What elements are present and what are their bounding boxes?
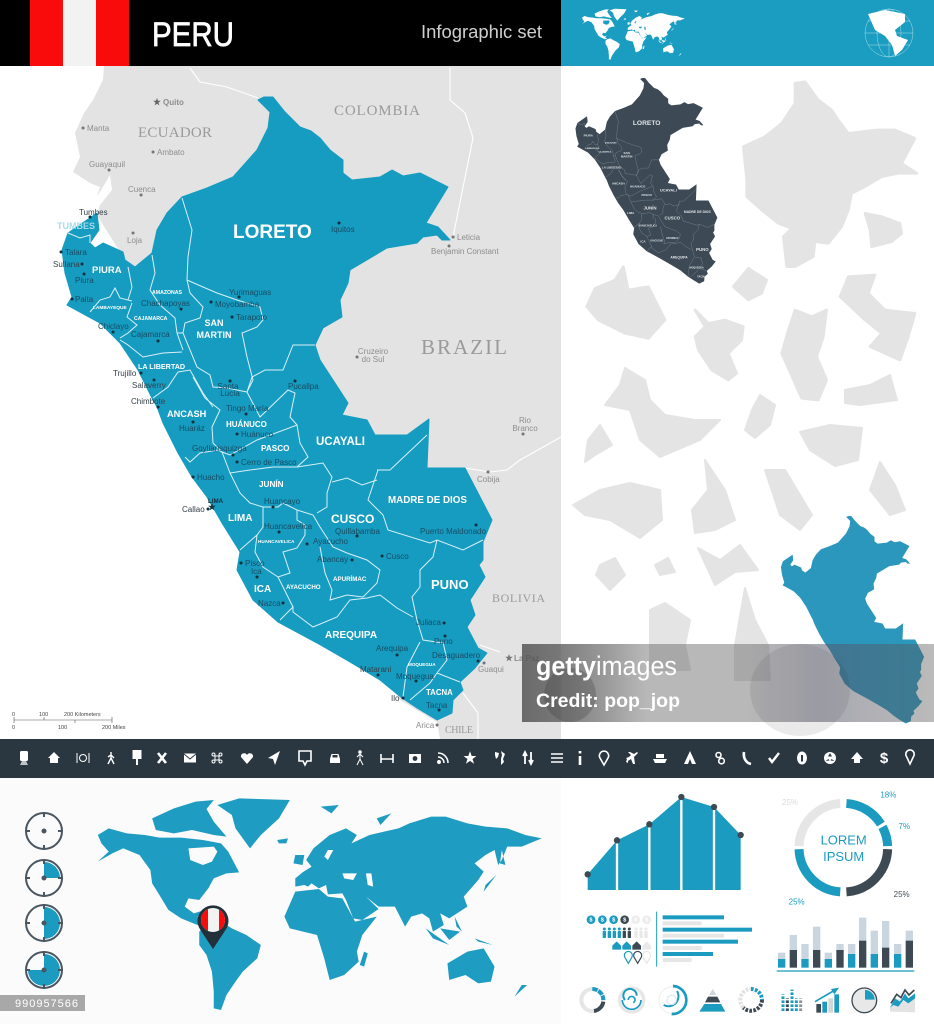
department names: APURÍMAC xyxy=(333,575,367,583)
icon: up-down arrows xyxy=(523,752,533,764)
icon: command xyxy=(212,753,222,763)
clock: half xyxy=(25,904,63,942)
icon: radiation xyxy=(824,752,836,764)
Peru city dots and names: Cerro de Pasco xyxy=(241,458,297,467)
Peru city dots and names: Goyllarisquizga xyxy=(192,444,247,453)
blue Peru silhouette xyxy=(781,516,924,723)
donut chart: IPSUM xyxy=(823,849,864,864)
icon: speech bubble xyxy=(299,751,311,765)
getty logo text: gettyimages xyxy=(536,651,677,681)
Peru city dots and names: Chiclayo xyxy=(98,322,129,331)
neighbouring country names: BRAZIL xyxy=(421,335,507,359)
icon: info letter xyxy=(579,751,581,765)
icon: house xyxy=(48,752,60,763)
Peru city dots and names: Puno xyxy=(434,637,453,646)
icon: info circle xyxy=(797,752,807,764)
icon: gears xyxy=(716,752,724,764)
icon: envelope xyxy=(184,754,196,762)
watermark xyxy=(522,644,934,736)
mini icon: dot matrix bars xyxy=(783,990,801,1011)
icon: ship xyxy=(653,754,667,763)
department names: SAN xyxy=(204,318,224,328)
department names: AMAZONAS xyxy=(152,290,183,296)
icon: bed xyxy=(381,754,393,763)
foreign cities: Quito xyxy=(163,98,184,107)
donut chart xyxy=(782,791,910,906)
pictogram rows: $ xyxy=(612,918,616,924)
department names: LA LIBERTAD xyxy=(138,362,185,371)
Peru city dots and names: Ilo xyxy=(391,694,400,703)
department names: LORETO xyxy=(233,222,312,243)
Peru city dots and names: Tumbes xyxy=(79,208,108,217)
donut chart: 25% xyxy=(894,890,910,899)
scale bar xyxy=(12,712,126,731)
Peru city dots and names: Santa xyxy=(218,382,239,391)
foreign cities: La Paz xyxy=(514,654,539,663)
neighbouring country names: CHILE xyxy=(445,725,473,736)
icon: up arrow xyxy=(851,752,863,763)
world map xyxy=(98,798,542,1010)
neighbouring country borders xyxy=(190,68,561,739)
department names: HUANCAVELICA xyxy=(258,539,295,544)
foreign cities: Rio xyxy=(519,416,532,425)
foreign cities xyxy=(83,98,539,730)
Peru city dots and names xyxy=(53,208,487,710)
department names: ICA xyxy=(254,584,271,595)
icon: earth xyxy=(495,751,505,765)
Peru city dots and names: Tingo María xyxy=(226,404,269,413)
Peru city dots and names: Moquegua xyxy=(396,672,434,681)
dark Peru map: AYACUCHO xyxy=(650,240,663,243)
neighbouring country names: BOLIVIA xyxy=(492,591,545,605)
icon: location pin xyxy=(599,751,609,765)
icon: check mark xyxy=(769,753,779,762)
pictogram rows: $ xyxy=(645,918,649,924)
donut chart: 25% xyxy=(782,798,798,807)
pictogram rows: $ xyxy=(623,918,627,924)
department names: TUMBES xyxy=(57,221,95,231)
department names: CUSCO xyxy=(331,512,374,526)
dark Peru map: UCAYALI xyxy=(660,188,677,193)
clock: three quarters xyxy=(25,951,63,989)
department names: AREQUIPA xyxy=(325,630,377,641)
scale bar: 200 Miles xyxy=(102,725,126,731)
department borders xyxy=(68,198,483,700)
dark Peru map: JUNÍN xyxy=(643,205,656,210)
Peru city dots and names: Callao xyxy=(182,505,205,514)
icon: tent xyxy=(684,751,696,764)
department names: UCAYALI xyxy=(316,436,365,448)
foreign cities: Guaqui xyxy=(478,665,504,674)
icon: star xyxy=(464,751,476,764)
dark Peru map: MADRE DE DIOS xyxy=(684,210,712,214)
Peru city dots and names: Puerto Maldonado xyxy=(420,527,487,536)
icon: airplane xyxy=(626,752,638,764)
pictogram rows: $ xyxy=(601,918,605,924)
pictogram rows: $ xyxy=(589,918,593,924)
Peru map xyxy=(62,97,492,720)
clock: empty xyxy=(25,812,63,850)
foreign cities: Cuenca xyxy=(128,185,156,194)
dark Peru map: PUNO xyxy=(696,247,709,252)
title: PERU xyxy=(152,16,234,54)
icon: plate and cutlery xyxy=(77,753,89,763)
neighbouring country names: COLOMBIA xyxy=(334,103,420,119)
icon: hiker xyxy=(108,752,114,764)
dark Peru map: CAJAMARCA xyxy=(599,151,612,154)
Peru city dots and names: Arequipa xyxy=(376,644,409,653)
horizontal bar chart xyxy=(657,912,752,967)
Peru city dots and names: Desaguadero xyxy=(432,651,481,660)
Peru city dots and names: Pucallpa xyxy=(288,382,319,391)
dark Peru map: HUANUCO xyxy=(630,184,646,188)
subtitle: Infographic set xyxy=(421,22,542,42)
icon: rss xyxy=(438,753,448,763)
Peru city dots and names: Nazca xyxy=(258,599,281,608)
department names: MARTIN xyxy=(196,330,232,340)
Peru city dots and names: Cajamarca xyxy=(131,330,170,339)
Peru city dots and names: Quillabamba xyxy=(335,527,380,536)
department names: PUNO xyxy=(431,577,469,592)
Peru city dots and names: Juliaca xyxy=(416,618,441,627)
icon: telephone xyxy=(744,752,751,764)
dark Peru map: ANCASH xyxy=(612,181,625,185)
map pin with flag xyxy=(198,905,229,949)
mini icon: radial arcs xyxy=(659,986,686,1014)
dark Peru map: PASCO xyxy=(641,193,653,197)
Peru city dots and names: Piura xyxy=(75,276,94,285)
foreign cities: Benjamin Constant xyxy=(431,247,499,256)
donut chart: LOREM xyxy=(821,832,867,847)
dark Peru map: ICA xyxy=(640,240,646,244)
neighbouring country names xyxy=(138,103,545,736)
department names: JUNÍN xyxy=(259,479,284,489)
icon: small world map xyxy=(582,9,685,60)
foreign cities: Arica xyxy=(416,721,435,730)
stock number tag: 990957566 xyxy=(15,998,78,1010)
department names: MOQUEGUA xyxy=(408,662,436,667)
donut chart: 18% xyxy=(880,791,896,800)
Peru city dots and names: Iquitos xyxy=(331,225,355,234)
dark Peru map: CUSCO xyxy=(665,215,681,220)
department names xyxy=(57,221,469,697)
panel: world map and clocks xyxy=(0,798,542,1011)
dark Peru map: AMAZONAS xyxy=(605,141,617,144)
icon: paper plane xyxy=(268,751,280,765)
department names: LIMA xyxy=(228,513,252,524)
grey department silhouettes, upper xyxy=(587,82,917,400)
icon: globe xyxy=(865,9,913,57)
panel: charts xyxy=(581,791,915,1014)
Peru city dots and names: Huancavelica xyxy=(264,522,313,531)
dark Peru map: MOQUEGUA xyxy=(690,266,704,269)
department names: CAJAMARCA xyxy=(134,316,168,322)
panel: department shapes xyxy=(573,78,924,723)
area chart xyxy=(584,794,744,890)
icon: sign xyxy=(132,750,142,765)
foreign cities: Manta xyxy=(87,124,110,133)
dark Peru map: TACNA xyxy=(697,274,706,278)
Peru city dots and names: Ayacucho xyxy=(313,537,349,546)
department names: HUÁNUCO xyxy=(226,420,267,429)
foreign cities: Branco xyxy=(512,424,538,433)
icon: train xyxy=(20,751,28,765)
dark Peru map: HUANCAVELICA xyxy=(638,225,657,228)
Peru city dots and names: Huánuco xyxy=(241,430,274,439)
foreign cities: Cruzeiro xyxy=(358,347,389,356)
mini icon: segmented donut xyxy=(581,989,603,1011)
foreign cities: Guayaquil xyxy=(89,160,125,169)
department names: ANCASH xyxy=(167,409,207,419)
dark Peru map: LAMBAYEQUE xyxy=(585,147,600,150)
Peru city dots and names: Moyobamba xyxy=(215,300,260,309)
stock number tag xyxy=(0,995,85,1011)
scale bar: 200 Kilometers xyxy=(64,712,101,718)
Peru city dots and names: Trujillo xyxy=(113,369,137,378)
Peru city dots and names: Salaverry xyxy=(132,381,166,390)
header: black title bar xyxy=(0,0,561,66)
pictogram rows: $ xyxy=(634,918,638,924)
neighbouring country names: ECUADOR xyxy=(138,125,212,141)
mini icon: pyramid xyxy=(699,989,725,1012)
dark Peru map: LORETO xyxy=(633,120,660,127)
mini icon: pie clock xyxy=(852,988,877,1013)
dark Peru map: LIMA xyxy=(627,211,635,215)
Peru city dots and names: Lucía xyxy=(220,389,240,398)
Peru city dots and names: Yurimaguas xyxy=(229,288,271,297)
department names: MADRE DE DIOS xyxy=(388,495,467,506)
header: blue bar with world map and globe xyxy=(561,0,934,66)
Peru city dots and names: Abancay xyxy=(317,555,348,564)
dark Peru map: LA LIBERTAD xyxy=(602,165,622,169)
scale bar: 0 xyxy=(12,712,15,718)
dark Peru map: APURIMAC xyxy=(666,237,679,240)
Peru city dots and names: Huacho xyxy=(197,473,225,482)
Peru city dots and names: Paita xyxy=(75,295,94,304)
Peru city dots and names: Chachapoyas xyxy=(141,299,190,308)
Peru city dots and names: Sullana xyxy=(53,260,80,269)
Peru city dots and names: Huancayo xyxy=(264,497,301,506)
mini icon: concentric rings xyxy=(620,988,644,1012)
Peru city dots and names: Tacna xyxy=(426,701,448,710)
Peru city dots and names: Pisco xyxy=(245,559,265,568)
mini icon: dotted ring xyxy=(740,989,762,1011)
Peru city dots and names: Chimbote xyxy=(131,397,166,406)
department names: TACNA xyxy=(426,688,453,697)
grey department silhouettes, lower xyxy=(573,368,905,680)
icon: car xyxy=(330,754,340,763)
stacked column chart xyxy=(777,918,914,971)
dark Peru map: AREQUIPA xyxy=(670,255,688,259)
department names: PIURA xyxy=(92,265,122,276)
foreign cities: Leticia xyxy=(457,233,481,242)
icon: dollar: $ xyxy=(880,750,889,767)
panel: main map of Peru and neighbours xyxy=(0,66,561,739)
scale bar: 0 xyxy=(12,725,15,731)
department names: LIMA xyxy=(208,498,224,505)
Peru city dots and names: Matarani xyxy=(360,665,391,674)
Peru city dots and names: Ica xyxy=(251,567,262,576)
Peru city dots and names: Tarapoto xyxy=(236,313,268,322)
donut chart: 25% xyxy=(789,897,805,906)
icon bar xyxy=(0,739,934,778)
scale bar: 100 xyxy=(39,712,48,718)
clock: quarter xyxy=(25,859,63,897)
Peru city dots and names: Huaráz xyxy=(179,424,205,433)
foreign cities: Loja xyxy=(127,236,143,245)
credit: Credit: pop_jop xyxy=(536,691,680,712)
icon: walking person xyxy=(357,751,363,765)
dark Peru map: SAN xyxy=(624,151,630,155)
neighbouring land xyxy=(73,66,561,739)
Peru city dots and names: Talara xyxy=(65,248,87,257)
dark Peru map: PIURA xyxy=(584,134,594,138)
mini icon: area trends xyxy=(890,990,915,1012)
scale bar: 100 xyxy=(58,725,67,731)
icon: heart xyxy=(241,753,253,764)
foreign cities: do Sul xyxy=(362,355,385,364)
dark Peru map xyxy=(575,78,717,284)
department names: PASCO xyxy=(261,444,290,453)
foreign cities: Ambato xyxy=(157,148,185,157)
pictogram rows xyxy=(587,915,651,963)
donut chart: 7% xyxy=(899,822,910,831)
icon: menu xyxy=(551,754,563,762)
department names: AYACUCHO xyxy=(286,584,321,591)
icon: cross xyxy=(158,753,166,763)
foreign cities: Cobija xyxy=(477,475,500,484)
mini icon: rising bars with arrow xyxy=(815,988,839,1013)
dark Peru map: MARTIN xyxy=(621,155,632,159)
icon: camera xyxy=(409,754,421,763)
flag of Peru xyxy=(30,0,129,66)
Peru city dots and names: Cusco xyxy=(386,552,409,561)
icon: location pin outline xyxy=(906,750,914,764)
department names: LAMBAYEQUE xyxy=(93,305,127,311)
